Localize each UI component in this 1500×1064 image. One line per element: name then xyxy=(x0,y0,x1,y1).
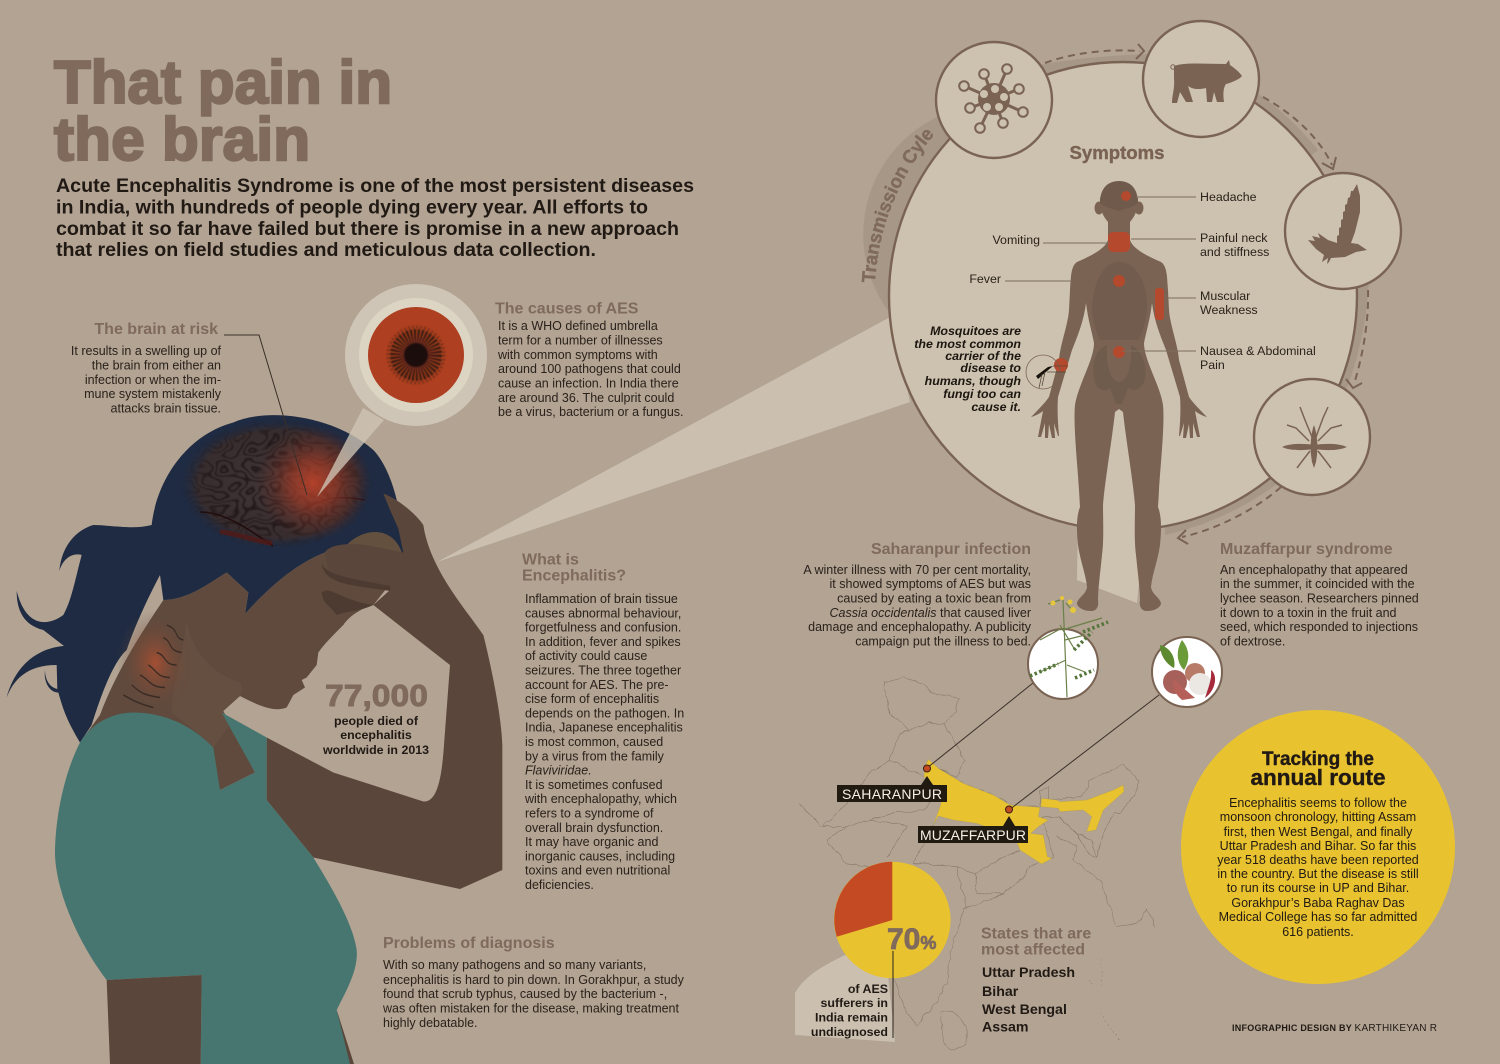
island chains xyxy=(1090,958,1118,1040)
most affected states list: most affected xyxy=(981,942,1085,958)
marker: Muzaffarpur xyxy=(918,806,1028,843)
section: what is encephalitis: with encephalopathy, which xyxy=(524,792,677,806)
section: Muzaffarpur syndrome: of dextrose. xyxy=(1220,634,1285,648)
leader: brain at risk xyxy=(224,335,307,495)
section: what is encephalitis: seizures. The three together xyxy=(525,664,681,678)
leader lines to food insets xyxy=(927,683,1159,810)
jaw shadow xyxy=(172,620,242,748)
arrow: mosquito to human xyxy=(1178,487,1281,544)
human figure xyxy=(1031,181,1207,611)
section: Muzaffarpur syndrome: lychee season. Researchers pinned xyxy=(1220,592,1419,606)
section: problems of diagnosis: was often mistaken for the disease, making treatment xyxy=(382,1002,680,1016)
section: the causes of AES: be a virus, bacterium or a fungus. xyxy=(498,405,684,419)
statistic: 77,000 deaths: people died of xyxy=(334,714,419,728)
section: what is encephalitis xyxy=(522,552,684,892)
mosquito note: cause it. xyxy=(971,400,1021,414)
forehead xyxy=(347,532,402,554)
section: the brain at risk: the brain from either an xyxy=(92,358,221,372)
arrow: pig to bird xyxy=(1263,97,1336,169)
section: what is encephalitis: forgetfulness and confusion. xyxy=(525,621,681,635)
section: problems of diagnosis: encephalitis is hard to pin down. In Gorakhpur, a study xyxy=(383,973,685,987)
note: undiagnosed xyxy=(811,982,888,1039)
note: undiagnosed: sufferers in xyxy=(821,996,888,1010)
symptom labels: Pain xyxy=(1200,358,1225,372)
most affected states list: Assam xyxy=(982,1020,1029,1036)
mosquito note: carrier of the xyxy=(945,349,1021,363)
circle: tracking the annual route: annual route xyxy=(1250,765,1386,790)
section: Muzaffarpur syndrome: Muzaffarpur syndrome xyxy=(1220,541,1393,558)
circle: tracking the annual route: Gorakhpur’s Baba Raghav Das xyxy=(1231,896,1405,910)
arm and hand xyxy=(267,494,502,889)
neighbouring borders and states xyxy=(800,723,1155,1050)
circle: tracking the annual route: in the country. But the disease is still xyxy=(1217,867,1419,881)
callout: Cassia plant xyxy=(1028,596,1108,699)
section: the causes of AES: with common symptoms with xyxy=(497,348,658,362)
India outline xyxy=(823,677,1140,1025)
title: That pain in xyxy=(54,49,392,116)
most affected states list: Uttar Pradesh xyxy=(982,965,1075,981)
circle: tracking the annual route: to run its course in UP and Bihar. xyxy=(1227,881,1409,895)
symptom markers xyxy=(1054,191,1164,372)
section: the causes of AES: around 100 pathogens that could xyxy=(498,362,681,376)
section: Saharanpur infection: damage and encephalopathy. A publicity xyxy=(808,620,1032,634)
intro paragraph: in India, with hundreds of people dying every year. All efforts to xyxy=(56,196,648,218)
circle: tracking the annual route: Tracking the xyxy=(1262,749,1374,770)
section: what is encephalitis: deficiencies. xyxy=(525,878,594,892)
circle: tracking the annual route: 616 patients. xyxy=(1282,925,1354,939)
note: undiagnosed: undiagnosed xyxy=(811,1025,888,1039)
marker: Saharanpur xyxy=(837,765,947,802)
section: what is encephalitis: of activity could cause xyxy=(525,649,647,663)
statistic: 77,000 deaths: encephalitis xyxy=(340,728,412,742)
symptom labels: Fever xyxy=(969,272,1001,286)
section: what is encephalitis: It is sometimes confused xyxy=(525,778,663,792)
section: what is encephalitis: is most common, caused xyxy=(525,735,663,749)
mosquito note: disease to xyxy=(960,361,1021,375)
section: what is encephalitis: cise form of encephalitis xyxy=(525,692,659,706)
symptom labels: Painful neck xyxy=(1200,231,1268,245)
credit: INFOGRAPHIC DESIGN BY KARTHIKEYAN R xyxy=(1232,1023,1437,1034)
heading: transmission cycle: Transmission Cyle xyxy=(862,130,933,282)
section: the causes of AES: It is a WHO defined umbrella xyxy=(498,319,658,333)
most affected states list: States that are xyxy=(981,926,1091,942)
arrow: bird to mosquito xyxy=(1346,290,1368,388)
circle: tracking the annual route: Uttar Pradesh and Bihar. So far this xyxy=(1220,839,1416,853)
pie chart: 70 per cent xyxy=(834,862,951,978)
section: the causes of AES: cause an infection. In India there xyxy=(498,376,679,390)
face and neck xyxy=(80,552,393,790)
section: what is encephalitis: depends on the pathogen. In xyxy=(525,706,684,720)
brain hot spot xyxy=(255,425,371,541)
icon: bird xyxy=(1285,173,1401,289)
circle: tracking the annual route: Medical College has so far admitted xyxy=(1219,910,1417,924)
symptom labels: Nausea & Abdominal xyxy=(1200,344,1316,358)
spine glow xyxy=(117,610,193,715)
icon: mosquito xyxy=(1254,379,1370,495)
section: what is encephalitis: Inflammation of brain tissue xyxy=(525,592,678,606)
section: Saharanpur infection: Saharanpur infection xyxy=(871,541,1031,558)
section: what is encephalitis: causes abnormal behaviour, xyxy=(525,606,681,620)
intro paragraph xyxy=(56,175,694,261)
section: Saharanpur infection xyxy=(803,541,1032,648)
circle: tracking the annual route: year 518 deaths have been reported xyxy=(1217,853,1419,867)
section: what is encephalitis: inorganic causes, including xyxy=(525,849,675,863)
section: what is encephalitis: by a virus from the family xyxy=(525,749,665,763)
affected states xyxy=(924,759,1124,864)
marker: Saharanpur: SAHARANPUR xyxy=(842,786,942,802)
intro paragraph: that relies on field studies and meticulous data collection. xyxy=(56,239,596,261)
symptom labels: and stiffness xyxy=(1200,245,1269,259)
section: what is encephalitis: Encephalitis? xyxy=(522,568,626,584)
icon: virus xyxy=(936,42,1052,158)
section: Muzaffarpur syndrome: seed, which responded to injections xyxy=(1220,620,1418,634)
section: the brain at risk: attacks brain tissue. xyxy=(111,402,221,416)
section: what is encephalitis: India, Japanese encephalitis xyxy=(525,721,683,735)
section: what is encephalitis: overall brain dysfunction. xyxy=(525,821,663,835)
symptom labels: Weakness xyxy=(1200,303,1258,317)
section: Saharanpur infection: caused by eating a toxic bean from xyxy=(837,592,1031,606)
section: what is encephalitis: account for AES. The pre- xyxy=(525,678,669,692)
section: what is encephalitis: In addition, fever and spikes xyxy=(525,635,681,649)
title xyxy=(54,49,392,173)
section: Saharanpur infection: A winter illness with 70 per cent mortality, xyxy=(803,563,1031,577)
statistic: 77,000 deaths: 77,000 xyxy=(325,678,428,713)
statistic: 77,000 deaths xyxy=(322,678,429,757)
section: the brain at risk: The brain at risk xyxy=(94,321,218,338)
section: Saharanpur infection: campaign put the illness to bed. xyxy=(855,634,1031,648)
section: what is encephalitis: Flaviviridae. xyxy=(525,764,592,778)
section: problems of diagnosis: found that scrub typhus, caused by the bacterium -, xyxy=(383,987,667,1001)
callout: lychee xyxy=(1152,637,1222,707)
shirt xyxy=(55,712,357,1064)
note: undiagnosed: of AES xyxy=(848,982,888,996)
note: undiagnosed: India remain xyxy=(815,1010,888,1024)
circle: tracking the annual route: Encephalitis seems to follow the xyxy=(1229,796,1407,810)
mosquito note xyxy=(914,324,1021,414)
floor patch beneath figure xyxy=(1077,515,1146,603)
symptom labels xyxy=(969,190,1316,372)
statistic: 70%: 70% xyxy=(887,923,936,956)
section: problems of diagnosis xyxy=(382,935,685,1030)
section: what is encephalitis: What is xyxy=(522,552,579,568)
section: problems of diagnosis: With so many pathogens and so many variants, xyxy=(383,958,646,972)
section: what is encephalitis: It may have organic and xyxy=(525,835,658,849)
callout: pathogen bubble xyxy=(317,284,487,497)
icon: pig xyxy=(1143,21,1259,137)
heading: symptoms: Symptoms xyxy=(1069,142,1165,163)
section: Muzaffarpur syndrome: in the summer, it coincided with the xyxy=(1220,577,1415,591)
symptom leader lines xyxy=(1005,197,1196,351)
hand crease xyxy=(322,562,390,615)
section: Saharanpur infection: it showed symptoms of AES but was xyxy=(830,577,1031,591)
circle: tracking the annual route: monsoon chronology, hitting Assam xyxy=(1220,810,1416,824)
section: the causes of AES: term for a number of illnesses xyxy=(498,334,663,348)
section: the causes of AES: The causes of AES xyxy=(495,300,639,318)
mosquito note: Mosquitoes are xyxy=(930,324,1021,338)
intro paragraph: combat it so far have failed but there is promise in a new approach xyxy=(56,218,679,240)
circle: tracking the annual route: first, then West Bengal, and finally xyxy=(1224,825,1413,839)
section: Muzaffarpur syndrome: An encephalopathy that appeared xyxy=(1220,563,1408,577)
section: the brain at risk: mune system mistakenly xyxy=(84,387,222,401)
symptom labels: Vomiting xyxy=(992,233,1040,247)
icon: mosquito biting wrist xyxy=(1026,355,1068,389)
mosquito note: fungi too can xyxy=(943,387,1021,401)
woman illustration xyxy=(7,415,502,1064)
map of India xyxy=(800,677,1155,1050)
section: the causes of AES xyxy=(495,300,684,419)
mosquito note: humans, though xyxy=(925,374,1021,388)
light beam from head to symptoms circle xyxy=(437,316,910,562)
intro paragraph: Acute Encephalitis Syndrome is one of the most persistent diseases xyxy=(56,175,694,197)
most affected states list: Bihar xyxy=(982,984,1019,1000)
pale callout patch xyxy=(795,955,895,1042)
symptom labels: Headache xyxy=(1200,190,1257,204)
section: problems of diagnosis: Problems of diagnosis xyxy=(383,935,555,952)
section: what is encephalitis: refers to a syndrome of xyxy=(525,806,654,820)
section: the brain at risk xyxy=(71,321,222,416)
arrow: virus to pig xyxy=(1045,44,1144,63)
transmission cycle band xyxy=(863,54,1369,535)
title: the brain xyxy=(54,106,310,173)
brain xyxy=(186,423,368,546)
symptoms circle xyxy=(889,62,1357,530)
section: the brain at risk: It results in a swelling up of xyxy=(71,344,222,358)
section: Muzaffarpur syndrome: it down to a toxin in the fruit and xyxy=(1220,606,1397,620)
section: problems of diagnosis: highly debatable. xyxy=(383,1016,478,1030)
most affected states list xyxy=(981,926,1091,1036)
leader: 70% note xyxy=(892,951,894,1038)
most affected states list: West Bengal xyxy=(982,1002,1067,1018)
section: the brain at risk: infection or when the im- xyxy=(85,373,221,387)
section: what is encephalitis: toxins and even nutritional xyxy=(525,864,670,878)
marker: Muzaffarpur: MUZAFFARPUR xyxy=(920,827,1026,843)
section: Saharanpur infection: Cassia occidentalis that caused liver xyxy=(830,606,1031,620)
hair xyxy=(7,415,404,742)
circle: tracking the annual route xyxy=(1181,710,1455,984)
spine xyxy=(123,625,183,708)
lower arm xyxy=(107,975,354,1064)
section: the causes of AES: are around 36. The culprit could xyxy=(498,391,674,405)
statistic: 77,000 deaths: worldwide in 2013 xyxy=(322,743,429,757)
symptom labels: Muscular xyxy=(1200,289,1250,303)
mosquito note: the most common xyxy=(914,337,1021,351)
section: Muzaffarpur syndrome xyxy=(1220,541,1419,648)
